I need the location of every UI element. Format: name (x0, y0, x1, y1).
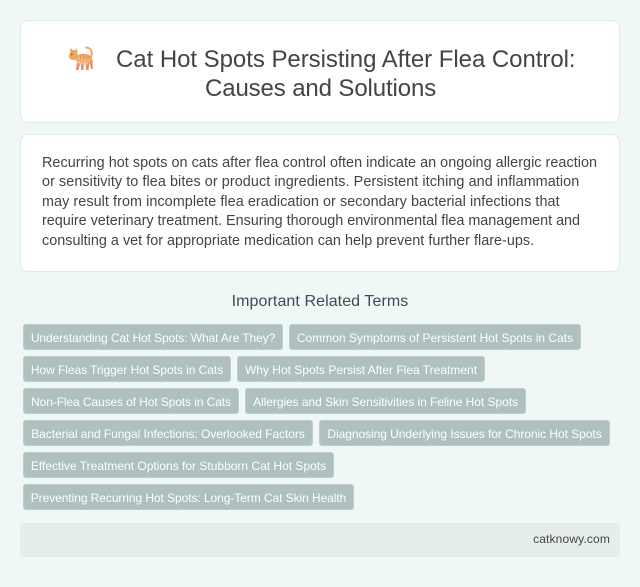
tag (289, 324, 581, 350)
tag (245, 388, 526, 414)
tag (23, 484, 354, 510)
tag (319, 420, 610, 446)
tag: Why Hot Spots Persist After Flea Treatment (245, 363, 477, 377)
summary text: require veterinary treatment. Ensuring thorough environmental flea management and (42, 213, 580, 229)
panel: summary (20, 134, 620, 272)
summary text: Recurring hot spots on cats after flea control often indicate an ongoing allergic reaction (42, 154, 597, 170)
footer site name: catknowy.com (533, 532, 610, 546)
panel: title card (20, 20, 620, 123)
icon: cat (68, 46, 93, 70)
heading line 1: Cat Hot Spots Persisting After Flea Control: (116, 46, 576, 73)
tag: Non-Flea Causes of Hot Spots in Cats (31, 395, 231, 409)
tag: Bacterial and Fungal Infections: Overlooked Factors (31, 427, 305, 441)
footer (20, 523, 620, 557)
tag: Diagnosing Underlying Issues for Chronic Hot Spots (327, 427, 602, 441)
heading line 2: Causes and Solutions (205, 74, 436, 102)
tag: Allergies and Skin Sensitivities in Feline Hot Spots (253, 395, 518, 409)
tag: Understanding Cat Hot Spots: What Are They? (31, 331, 275, 345)
summary text: consulting a vet for appropriate medication can help prevent further flare-ups. (42, 232, 534, 248)
summary text: may result from incomplete flea eradication or secondary bacterial infections that (42, 194, 560, 210)
tag: Effective Treatment Options for Stubborn Cat Hot Spots (31, 459, 326, 473)
summary text (42, 154, 597, 248)
tag (23, 356, 231, 382)
heading: related terms: Important Related Terms (232, 292, 408, 310)
tag (23, 452, 334, 478)
tag: Preventing Recurring Hot Spots: Long-Term Cat Skin Health (31, 491, 346, 505)
summary text: or sensitivity to flea bites or product ingredients. Persistent itching and inflammation (42, 174, 579, 190)
tag (23, 324, 283, 350)
tag (23, 420, 313, 446)
tag: Common Symptoms of Persistent Hot Spots in Cats (297, 331, 573, 345)
tag: How Fleas Trigger Hot Spots in Cats (31, 363, 223, 377)
tag (237, 356, 485, 382)
tags list (23, 324, 610, 510)
tag (23, 388, 239, 414)
